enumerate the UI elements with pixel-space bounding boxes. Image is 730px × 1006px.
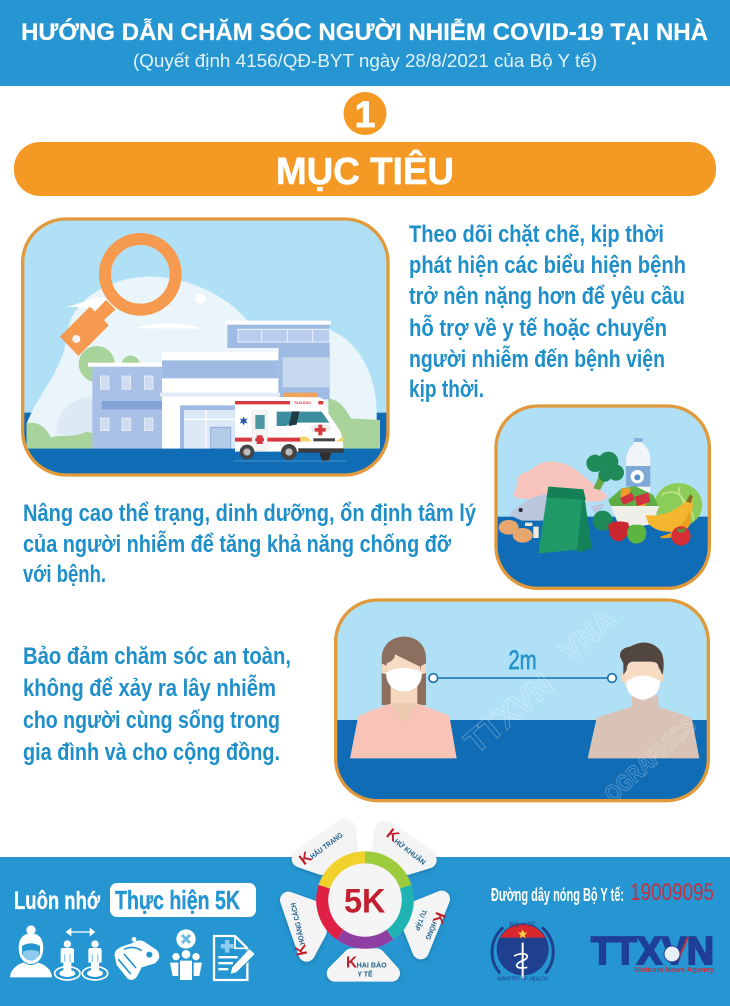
reminder: Luôn nhớ Thực hiện 5K: Thực hiện 5K (115, 885, 240, 915)
text block: monitoring goal (409, 221, 686, 403)
petal: Khẩu trang (296, 825, 347, 869)
petal: Khẩu trang: K (296, 849, 315, 869)
title: HƯỚNG DẪN CHĂM SÓC NGƯỜI NHIỄM COVID-19 TẠI NHÀ (21, 17, 708, 46)
text block: safety goal: không để xảy ra lây nhiễm (23, 674, 276, 702)
section heading bar: MỤC TIÊU (276, 149, 454, 193)
petal: Khử khuẩn: HỬ KHUẨN (393, 837, 427, 867)
text block: monitoring goal: hỗ trợ về y tế hoặc chuyển (409, 314, 667, 342)
person: man (588, 643, 699, 758)
logo: TTXVN: Vietnam News Agency (634, 965, 715, 974)
icon: no gathering (170, 929, 202, 980)
petal: Không tụ tập: K (429, 910, 449, 926)
illustration: healthy food (496, 406, 709, 588)
text block: safety goal: Bảo đảm chăm sóc an toàn, (23, 643, 291, 670)
text block: safety goal: gia đình và cho cộng đồng. (23, 739, 280, 766)
icon: health declaration form (214, 936, 255, 980)
petal: Khoảng cách: K (292, 943, 311, 957)
header band (0, 0, 730, 86)
petal: Khai báo y tế: Y TẾ (357, 969, 373, 979)
reminder: Luôn nhớ Thực hiện 5K (14, 883, 256, 917)
icon: magnifying glass (60, 239, 176, 356)
petal: Khẩu trang: HẨU TRANG (308, 830, 345, 861)
5K icon row (10, 925, 255, 980)
petal: Khoảng cách: HOẢNG CÁCH (289, 902, 307, 946)
text block: monitoring goal: phát hiện các biểu hiện bệnh (409, 252, 686, 279)
icon: washing hands (115, 937, 159, 980)
text block: nutrition goal: với bệnh. (23, 561, 106, 588)
illustration: two masked people 2m apart: TTXVN (458, 666, 561, 761)
reminder: Luôn nhớ Thực hiện 5K: Luôn nhớ (14, 887, 100, 915)
petal: Khoảng cách (283, 900, 318, 957)
logo: TTXVN: TTXVN (591, 930, 714, 973)
petal: Khử khuẩn: K (383, 825, 402, 846)
illustration: hospital, magnifier and ambulance (23, 219, 388, 475)
text block: monitoring goal: kịp thời. (409, 376, 484, 403)
section number badge (344, 92, 386, 135)
logo: Ministry of Health: BỘ Y TẾ (510, 919, 536, 929)
petal: Không tụ tập: TỤ TẬP (412, 908, 429, 932)
illustration: two masked people 2m apart: OGRAPHICS (599, 712, 701, 807)
ambulance (235, 393, 344, 461)
section number badge: 1 (355, 94, 375, 135)
text block: monitoring goal: Theo dõi chặt chẽ, kịp thời (409, 221, 664, 248)
petal: Khai báo y tế: K (346, 955, 357, 972)
petal: Khai báo y tế (335, 955, 392, 979)
illustration: two masked people 2m apart (336, 600, 708, 807)
logo: Ministry of Health: MINISTRY OF HEALTH (498, 977, 548, 983)
section heading bar (14, 142, 716, 196)
icon: two people at a distance (55, 929, 108, 980)
ring and 5K (316, 851, 414, 949)
text block: nutrition goal: của người nhiễm để tăng khả năng chống đỡ (23, 530, 452, 558)
distance marker (429, 645, 616, 682)
petal: Khử khuẩn (383, 825, 431, 868)
text block: nutrition goal (23, 500, 477, 588)
person: woman (350, 637, 457, 758)
logo: Ministry of Health (492, 919, 553, 983)
petal: Không tụ tập: HÔNG (424, 920, 439, 941)
ring and 5K: 5K (344, 882, 385, 920)
footer band (0, 857, 730, 1006)
illustration: two masked people 2m apart: VNA (553, 603, 623, 669)
text block: monitoring goal: người nhiễm đến bệnh viện (409, 345, 665, 373)
text block: nutrition goal: Nâng cao thể trạng, dinh dưỡng, ổn định tâm lý (23, 500, 477, 527)
subtitle: (Quyết định 4156/QĐ-BYT ngày 28/8/2021 của Bộ Y tế) (133, 51, 597, 71)
text block: safety goal (23, 643, 291, 766)
ambulance: TAXI.EDU (294, 401, 311, 405)
hotline: Đường dây nóng Bộ Y tế: (491, 885, 624, 905)
petal: Khai báo y tế: HAI BÁO (357, 961, 387, 970)
text block: safety goal: cho người cùng sống trong (23, 707, 280, 734)
5K diagram (283, 825, 449, 979)
icon: person wearing mask (10, 925, 52, 977)
distance marker: 2m (508, 645, 537, 675)
petal: Không tụ tập (412, 899, 449, 951)
